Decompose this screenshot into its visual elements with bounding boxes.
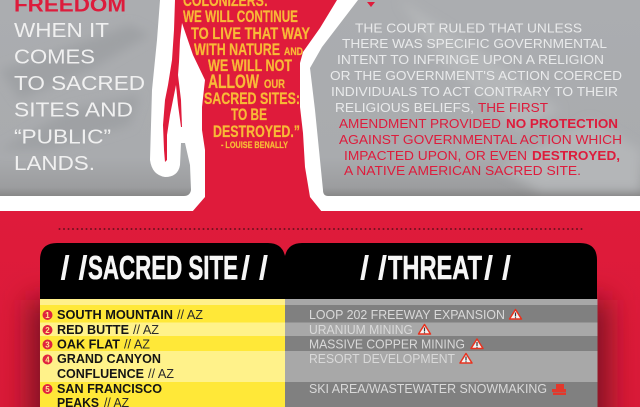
court ruling text: AMENDMENT PROVIDED <box>339 116 501 131</box>
left heading text <box>14 0 145 175</box>
court ruling text: OR THE GOVERNMENT'S ACTION COERCED <box>330 68 622 83</box>
court ruling text: INDIVIDUALS TO ACT CONTRARY TO THEIR <box>331 84 618 99</box>
court ruling text: THE COURT RULED THAT UNLESS <box>355 20 582 35</box>
court ruling text: THE FIRST <box>478 100 548 115</box>
site number badges: 1 <box>45 311 50 320</box>
small red triangle <box>367 2 375 7</box>
left heading text: TO SACRED <box>14 73 145 95</box>
site names: // AZ <box>177 308 203 322</box>
quote by Louise Benally: ALLOW <box>208 72 259 93</box>
table header tabs: THREAT <box>388 249 482 286</box>
table header tabs <box>40 243 597 299</box>
table header tabs: SACRED SITE <box>88 249 238 286</box>
site names: GRAND CANYON <box>57 352 161 366</box>
court ruling text: A NATIVE AMERICAN SACRED SITE. <box>344 163 581 178</box>
quote by Louise Benally: DESTROYED.” <box>213 123 300 141</box>
site names <box>57 308 203 407</box>
court ruling text: IMPACTED UPON, OR EVEN <box>344 148 527 163</box>
quote by Louise Benally: WITH NATURE <box>194 41 280 59</box>
site number badges: 3 <box>45 340 50 350</box>
threat column <box>285 299 598 407</box>
table header tabs: // <box>484 249 511 286</box>
left heading text: “PUBLIC” <box>14 126 111 148</box>
white silhouette outline <box>0 0 640 211</box>
site names: // AZ <box>124 338 150 352</box>
site names: // AZ <box>148 367 174 381</box>
icons: warning triangles <box>418 310 522 363</box>
site number badges <box>42 310 52 394</box>
quote by Louise Benally: WE WILL NOT <box>208 57 292 75</box>
site names: // AZ <box>133 323 159 337</box>
left heading text: SITES AND <box>14 100 133 122</box>
threat descriptions: SKI AREA/WASTEWATER SNOWMAKING <box>309 382 547 396</box>
table <box>40 243 598 407</box>
court ruling text <box>330 20 622 178</box>
court ruling text: THERE WAS SPECIFIC GOVERNMENTAL <box>342 36 607 51</box>
quote by Louise Benally: TO LIVE THAT WAY <box>191 25 310 43</box>
quote by Louise Benally: WE WILL CONTINUE <box>183 8 298 26</box>
site names: SOUTH MOUNTAIN <box>57 308 173 322</box>
site number badges: 2 <box>45 326 50 335</box>
red silhouette figure <box>163 0 337 212</box>
threat descriptions <box>309 308 547 396</box>
sacred site column <box>40 299 285 407</box>
site names: OAK FLAT <box>57 338 120 352</box>
court ruling text: DESTROYED, <box>532 148 620 163</box>
quote by Louise Benally: OUR <box>264 77 285 91</box>
site number badges: 5 <box>45 385 50 394</box>
court ruling text: RELIGIOUS BELIEFS, <box>335 100 474 115</box>
left heading text: LANDS. <box>14 153 95 175</box>
table header tabs: // <box>360 249 387 286</box>
threat descriptions: LOOP 202 FREEWAY EXPANSION <box>309 308 505 322</box>
threat descriptions: RESORT DEVELOPMENT <box>309 352 455 366</box>
quote by Louise Benally <box>183 0 310 151</box>
table header tabs: // <box>241 249 268 286</box>
site number badges: 4 <box>45 356 50 364</box>
left heading text: WHEN IT <box>14 20 109 42</box>
table header tabs: // <box>60 249 88 286</box>
left heading text: COMES <box>14 46 95 68</box>
site names: CONFLUENCE <box>57 367 144 381</box>
dotted divider <box>60 228 583 230</box>
court ruling text: AGAINST GOVERNMENTAL ACTION WHICH <box>339 132 622 147</box>
quote by Louise Benally: SACRED SITES: <box>204 90 300 108</box>
threat descriptions: URANIUM MINING <box>309 323 413 337</box>
threat descriptions: MASSIVE COPPER MINING <box>309 338 465 352</box>
quote by Louise Benally: AND <box>284 46 303 58</box>
site names: SAN FRANCISCO <box>57 382 162 396</box>
gray background panel <box>0 0 640 197</box>
icon: bulldozer <box>552 384 566 395</box>
red lower background <box>0 211 640 407</box>
court ruling text: NO PROTECTION <box>506 116 618 131</box>
quote by Louise Benally: TO BE <box>231 106 267 124</box>
quote by Louise Benally: - LOUISE BENALLY <box>221 140 289 151</box>
site names: RED BUTTE <box>57 323 129 337</box>
court ruling text: INTENT TO INFRINGE UPON A RELIGION <box>337 52 604 67</box>
